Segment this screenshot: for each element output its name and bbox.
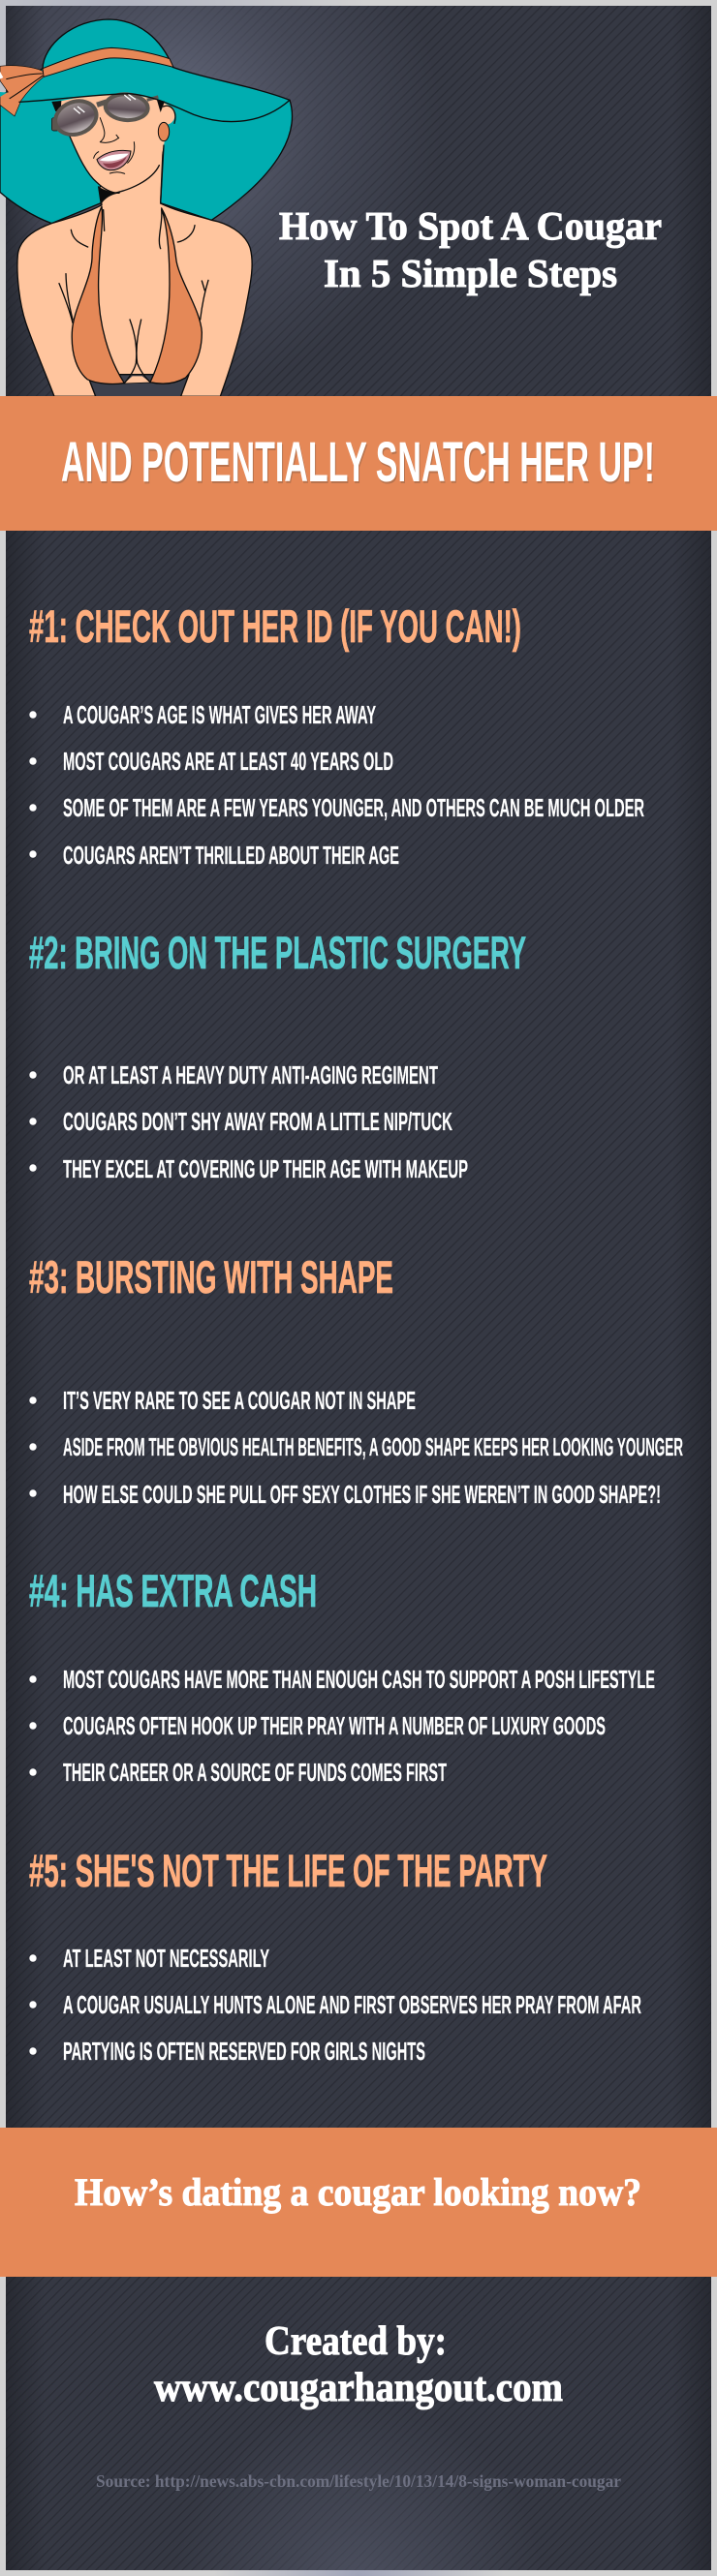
- bullet list 1: MOST COUGARS ARE AT LEAST 40 YEARS OLD: [63, 747, 393, 776]
- source line: Source: http://news.abs-cbn.com/lifestyle/10/13/14/8-signs-woman-cougar: [96, 2471, 621, 2491]
- bullet list 3: IT’S VERY RARE TO SEE A COUGAR NOT IN SHAPE: [63, 1386, 416, 1415]
- credit: www.cougarhangout.com: [154, 2366, 563, 2410]
- bullet list 2: [29, 1060, 468, 1183]
- heading 4: #4: HAS EXTRA CASH: [29, 1565, 317, 1616]
- hat front brim line: [19, 94, 290, 122]
- title: In 5 Simple Steps: [324, 251, 617, 295]
- section 1: [29, 600, 644, 870]
- bullet list 4: [29, 1665, 655, 1787]
- hat: [0, 19, 292, 224]
- mouth: [94, 142, 135, 173]
- bullet list 1: [29, 700, 644, 870]
- bullet list 1: A COUGAR’S AGE IS WHAT GIVES HER AWAY: [63, 700, 376, 729]
- heading 3: #3: BURSTING WITH SHAPE: [29, 1251, 393, 1303]
- credit: Created by:: [265, 2319, 447, 2364]
- banner: subtitle: [0, 396, 717, 531]
- sunglasses: [50, 93, 158, 140]
- section 2: [29, 927, 526, 1183]
- section 4: [29, 1565, 655, 1787]
- banner: closing question: How’s dating a cougar looking now?: [75, 2170, 641, 2214]
- bullet list 5: [29, 1944, 641, 2066]
- bow: [0, 66, 44, 116]
- credit: [154, 2319, 563, 2410]
- bullet list 5: PARTYING IS OFTEN RESERVED FOR GIRLS NIGHTS: [63, 2037, 425, 2066]
- section 5: [29, 1845, 641, 2066]
- torso gap: [84, 375, 191, 396]
- bikini: [72, 206, 202, 383]
- bullet list 3: [29, 1386, 683, 1509]
- section 3: [29, 1251, 683, 1509]
- nose: [100, 118, 119, 142]
- jaw and neck lines: [104, 145, 164, 249]
- bullet list 2: OR AT LEAST A HEAVY DUTY ANTI-AGING REGIMENT: [63, 1060, 438, 1089]
- banner: closing question: [0, 2128, 717, 2277]
- neck shadow: [98, 187, 120, 204]
- ear and earring: [158, 106, 175, 141]
- title: [279, 203, 662, 295]
- neck and shoulders: [17, 145, 252, 396]
- title: How To Spot A Cougar: [279, 203, 662, 248]
- face: [53, 94, 175, 193]
- illustration: woman in teal sun hat: [0, 19, 292, 396]
- hair: [51, 100, 165, 112]
- bullet list 2: COUGARS DON’T SHY AWAY FROM A LITTLE NIP/TUCK: [63, 1107, 452, 1136]
- bullet list 1: COUGARS AREN’T THRILLED ABOUT THEIR AGE: [63, 841, 399, 870]
- hat band: [43, 47, 173, 77]
- bullet list 5: AT LEAST NOT NECESSARILY: [63, 1944, 269, 1973]
- body contour lines: [59, 226, 208, 383]
